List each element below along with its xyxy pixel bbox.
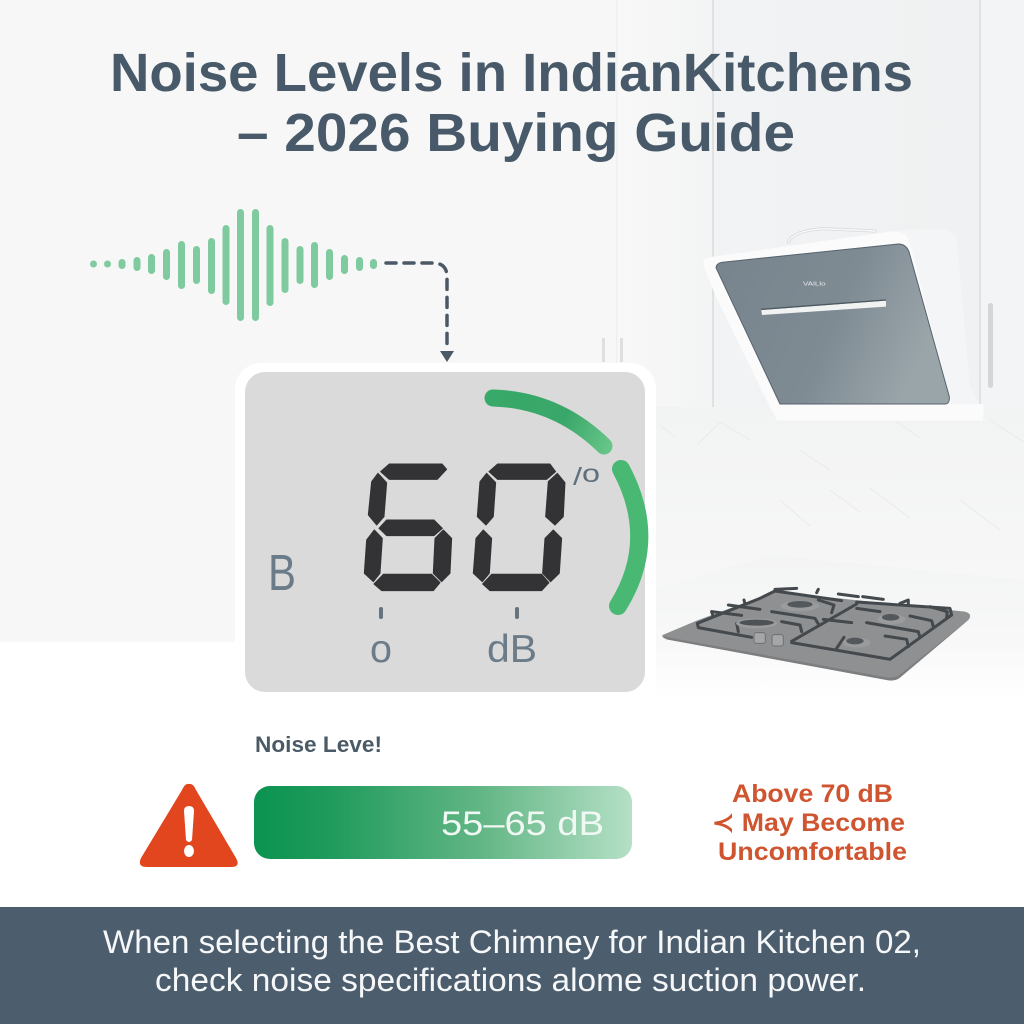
digit 0 xyxy=(473,464,565,591)
warning text: ≺ May Become xyxy=(712,809,905,837)
cooker hood xyxy=(703,229,983,421)
tick left xyxy=(379,607,383,619)
meter screen xyxy=(245,372,645,692)
hood white frame xyxy=(703,231,983,421)
reading 60 seven-segment digits xyxy=(364,464,565,591)
sound waveform icon xyxy=(90,209,377,321)
digit 6 xyxy=(364,464,452,591)
hood bar handle xyxy=(761,301,886,315)
decibel meter panel xyxy=(235,363,656,701)
warning text: Above 70 dB xyxy=(732,780,893,808)
title xyxy=(110,43,913,163)
noise level label: Noise Leve! xyxy=(255,732,382,757)
tick right xyxy=(515,607,519,619)
title: – 2026 Buying Guide xyxy=(237,103,795,163)
background wall xyxy=(0,0,1024,642)
cooktop grates xyxy=(697,588,952,659)
white lower area xyxy=(0,642,1024,912)
hood glass panel xyxy=(716,244,949,404)
warning text: Uncomfortable xyxy=(718,838,907,866)
knobs xyxy=(754,633,783,646)
scale label o: o xyxy=(370,628,392,671)
footer band: check noise specifications alome suction power. xyxy=(155,962,866,998)
dashed arrow from waveform to meter xyxy=(386,263,454,362)
footer band: When selecting the Best Chimney for Indian Kitchen 02, xyxy=(103,924,921,960)
burners xyxy=(736,601,906,648)
hood top handle xyxy=(788,229,875,242)
meter white border xyxy=(235,363,656,701)
countertop xyxy=(655,555,1024,700)
noise range bar: 55–65 dB xyxy=(441,805,604,843)
warning triangle icon xyxy=(140,784,238,867)
warning text xyxy=(712,780,907,866)
cooktop plate xyxy=(662,592,970,680)
small percent-like mark: o xyxy=(582,460,600,488)
title: Noise Levels in IndianKitchens xyxy=(110,43,913,103)
wall cabinets xyxy=(602,0,1024,407)
hood logo: VAlLlo xyxy=(803,282,826,288)
backsplash tiles xyxy=(655,407,1024,577)
footer band xyxy=(0,907,1024,1024)
hood side panel xyxy=(900,229,983,410)
green gauge arc upper xyxy=(493,398,604,446)
gas cooktop xyxy=(662,588,970,680)
green gauge arc lower xyxy=(618,469,639,606)
kitchen scene xyxy=(602,0,1024,700)
scale label dB: dB xyxy=(487,628,537,671)
left B label: B xyxy=(268,544,296,601)
small percent-like mark: / xyxy=(573,463,580,491)
noise range bar xyxy=(254,786,632,859)
